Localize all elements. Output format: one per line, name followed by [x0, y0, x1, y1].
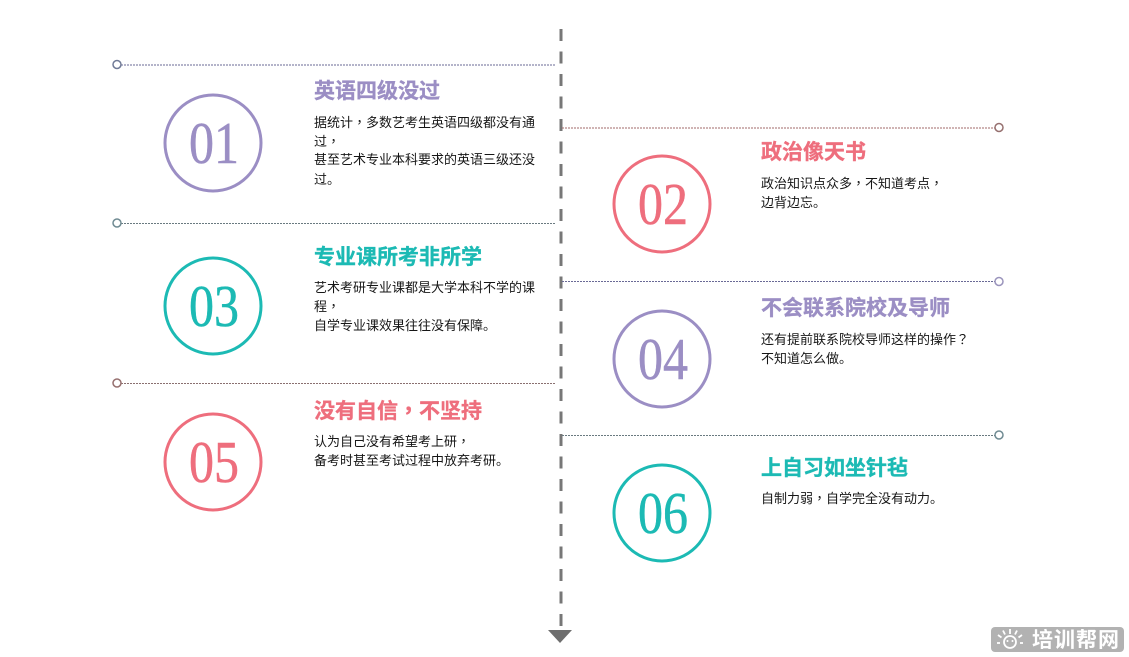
- heading 06: 上自习如坐针毡: [761, 457, 908, 480]
- connector 06: [562, 431, 1003, 439]
- number badge 01: [165, 95, 261, 191]
- connector 03: [113, 219, 556, 227]
- arrow: timeline end: [548, 630, 572, 643]
- text block 05: 认为自己没有希望考上研，: [314, 431, 470, 450]
- icon: sun face: [997, 629, 1023, 648]
- text block 02: 边背边忘。: [761, 195, 826, 210]
- heading 04: 不会联系院校及导师: [761, 296, 950, 320]
- heading 01: 英语四级没过: [314, 80, 440, 103]
- text block 01: 过。: [314, 172, 340, 187]
- panel: item 03: [113, 219, 556, 354]
- number badge 03: 03: [189, 273, 239, 339]
- number badge 06: 06: [638, 480, 688, 546]
- panel: item 01: [113, 60, 556, 191]
- panel: item 04: [562, 278, 1003, 407]
- connector 02: [562, 124, 1003, 132]
- number badge 05: [165, 414, 261, 510]
- watermark text: 培训帮网: [1032, 629, 1120, 652]
- number badge 06: [614, 465, 710, 561]
- number badge 03: [165, 258, 261, 354]
- connector 04: [562, 278, 1003, 286]
- text block 02: 政治知识点众多，不知道考点，: [761, 173, 943, 192]
- text block 05: [314, 431, 509, 468]
- number badge 02: 02: [638, 171, 688, 237]
- central dashed timeline: [560, 29, 562, 627]
- text block 03: 艺术考研专业课都是大学本科不学的课: [314, 280, 535, 295]
- panel: item 05: [113, 379, 556, 510]
- text block 02: [761, 173, 943, 210]
- text block 03: 自学专业课效果往往没有保障。: [314, 318, 496, 333]
- panel: item 06: [562, 431, 1003, 561]
- text block 04: 不知道怎么做。: [761, 351, 852, 366]
- text block 04: 还有提前联系院校导师这样的操作？: [761, 329, 969, 348]
- panel: item 02: [562, 124, 1003, 252]
- number badge 05: 05: [189, 429, 239, 495]
- text block 01: 甚至艺术专业本科要求的英语三级还没: [314, 152, 535, 167]
- watermark logo: [991, 627, 1124, 652]
- connector 01: [113, 60, 556, 68]
- number badge 01: 01: [189, 110, 239, 176]
- text block 03: [314, 280, 535, 333]
- text block 04: [761, 329, 969, 366]
- text block 01: 据统计，多数艺考生英语四级都没有通: [314, 112, 535, 131]
- text block 03: 程，: [314, 296, 340, 315]
- heading 05: 没有自信，不坚持: [314, 395, 482, 425]
- number badge 04: 04: [638, 326, 688, 392]
- text block 06: 自制力弱，自学完全没有动力。: [761, 488, 943, 507]
- text block 01: 过，: [314, 131, 340, 150]
- number badge 02: [614, 156, 710, 252]
- text block 01: [314, 112, 535, 187]
- connector 05: [113, 379, 556, 387]
- text block 05: 备考时甚至考试过程中放弃考研。: [314, 453, 509, 468]
- number badge 04: [614, 311, 710, 407]
- heading 03: 专业课所考非所学: [314, 245, 482, 269]
- heading 02: 政治像天书: [761, 141, 866, 164]
